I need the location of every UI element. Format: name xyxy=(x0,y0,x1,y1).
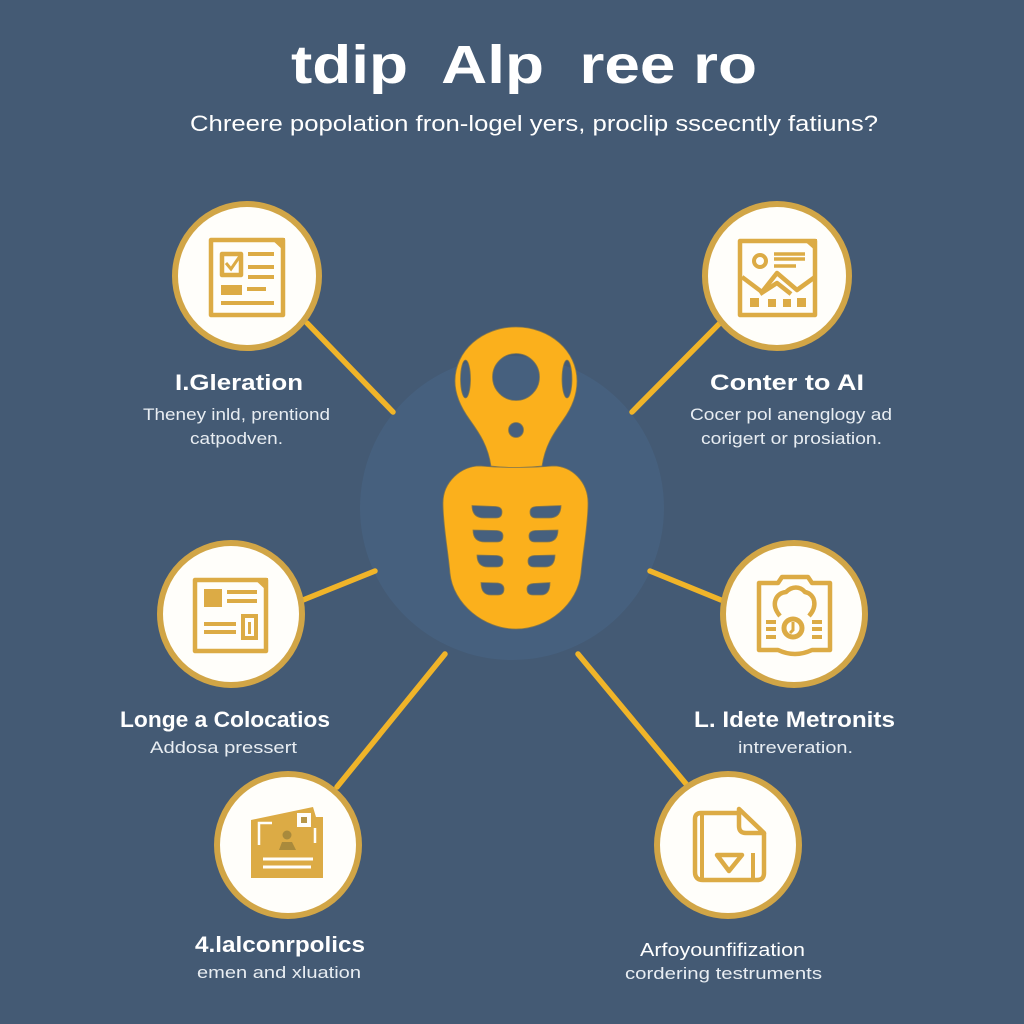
robot head xyxy=(455,327,577,468)
connector: middle right xyxy=(650,571,721,600)
icon circle 5 xyxy=(217,774,359,916)
heading 3: Longe a Colocatios xyxy=(120,707,330,732)
icon: ID card folder xyxy=(251,807,323,878)
subtitle: Chreere popolation fron-logel yers, proclip sscecntly fatiuns? xyxy=(190,111,878,136)
heading 6: Arfoyounfifization xyxy=(640,940,805,960)
icon circle 4 xyxy=(723,543,865,685)
connector: bottom right xyxy=(578,654,687,785)
central icon: robot figure xyxy=(443,327,588,629)
icon: gear document xyxy=(759,577,830,654)
description 2: corigert or prosiation. xyxy=(701,429,882,448)
description 1: Theney inld, prentiond xyxy=(143,405,330,424)
icon circle 6 xyxy=(657,774,799,916)
central backdrop circle xyxy=(360,356,664,660)
item 5: bottom left xyxy=(195,774,365,982)
description 1: catpodven. xyxy=(190,429,283,448)
item 3: middle left xyxy=(120,543,330,757)
description 4: intreveration. xyxy=(738,738,853,757)
item 4: middle right xyxy=(694,543,895,757)
icon: checklist document xyxy=(211,238,285,315)
icon: folded file xyxy=(695,809,764,880)
item 6: bottom right xyxy=(625,774,822,983)
robot body with vents xyxy=(443,466,588,629)
icon circle 3 xyxy=(160,543,302,685)
icon circle 1 xyxy=(175,204,319,348)
icon: map document xyxy=(740,239,817,315)
connector: bottom left xyxy=(337,654,445,787)
description 2: Cocer pol anenglogy ad xyxy=(690,405,892,424)
icon circle 2 xyxy=(705,204,849,348)
connector: top right xyxy=(632,323,720,412)
item 2: top right xyxy=(690,204,892,448)
connector: middle left xyxy=(303,571,375,600)
title: tdip Alp ree ro xyxy=(291,35,757,95)
item 1: top left xyxy=(143,204,330,448)
description 5: emen and xluation xyxy=(197,963,361,982)
description 1 xyxy=(143,405,330,448)
icon: profile document xyxy=(195,578,268,651)
description 3: Addosa pressert xyxy=(150,738,297,757)
description 6: cordering testruments xyxy=(625,964,822,983)
heading 5: 4.lalconrpolics xyxy=(195,932,365,957)
heading 2: Conter to AI xyxy=(710,370,864,395)
connector: top left xyxy=(307,323,393,412)
heading 1: I.Gleration xyxy=(175,370,303,395)
heading 4: L. Idete Metronits xyxy=(694,707,895,732)
description 2 xyxy=(690,405,892,448)
